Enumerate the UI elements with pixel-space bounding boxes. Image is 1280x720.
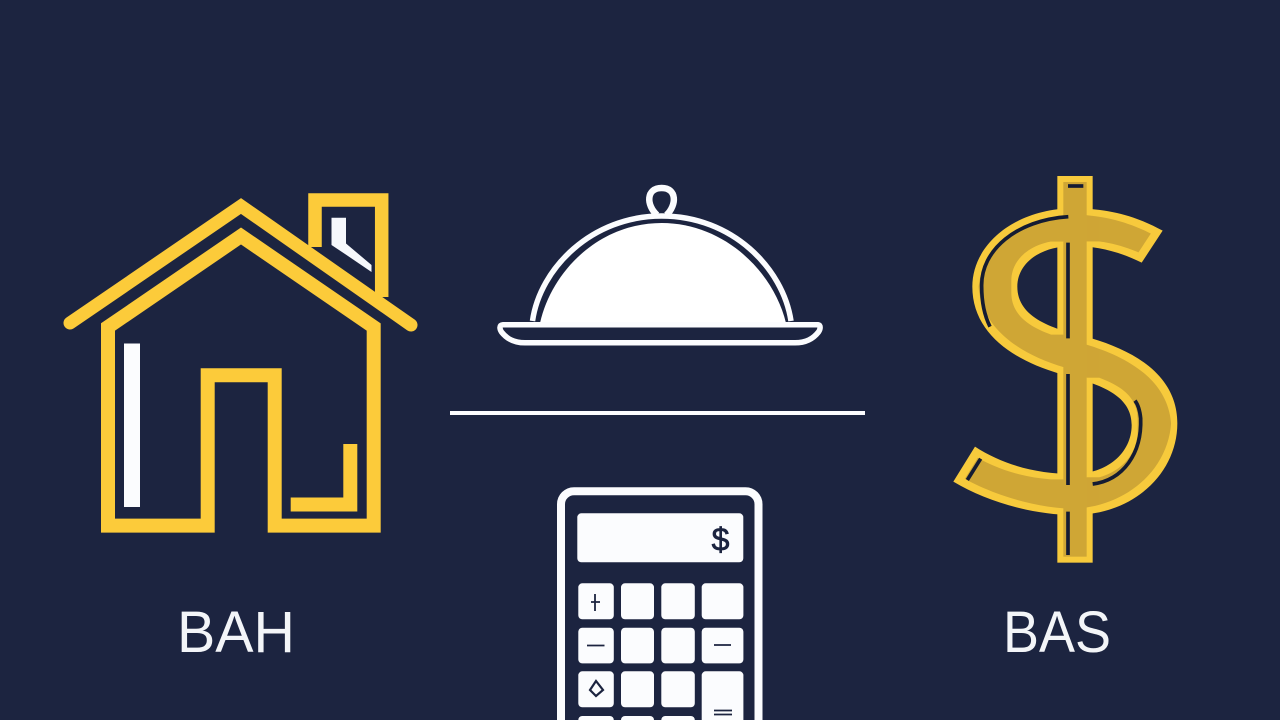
serving plate [500, 325, 820, 343]
cloche dome fill [540, 223, 786, 323]
icon: food cloche [500, 188, 820, 343]
calculator display [577, 513, 743, 562]
dollar outline layer [953, 176, 1177, 563]
icon: house [70, 200, 411, 526]
corner accent [291, 444, 350, 504]
label: BAH: BAH [177, 600, 295, 665]
cloche dome outline [532, 216, 791, 321]
window bar [124, 344, 140, 507]
calculator body [561, 491, 758, 720]
calculator keys [578, 583, 743, 720]
chimney smoke [332, 218, 372, 272]
icon: dollar sign [953, 176, 1177, 563]
cloche handle [649, 188, 674, 215]
icon: calculator [561, 491, 758, 720]
chimney [315, 200, 382, 297]
dollar shadow lines [967, 186, 1141, 555]
label: BAS: BAS [1003, 600, 1111, 665]
dollar gold fill layer [953, 176, 1177, 563]
roof [70, 206, 411, 325]
house walls and door [108, 236, 374, 526]
display dollar sign: $ [712, 522, 730, 558]
key symbols [587, 594, 732, 714]
divider line [450, 411, 865, 415]
